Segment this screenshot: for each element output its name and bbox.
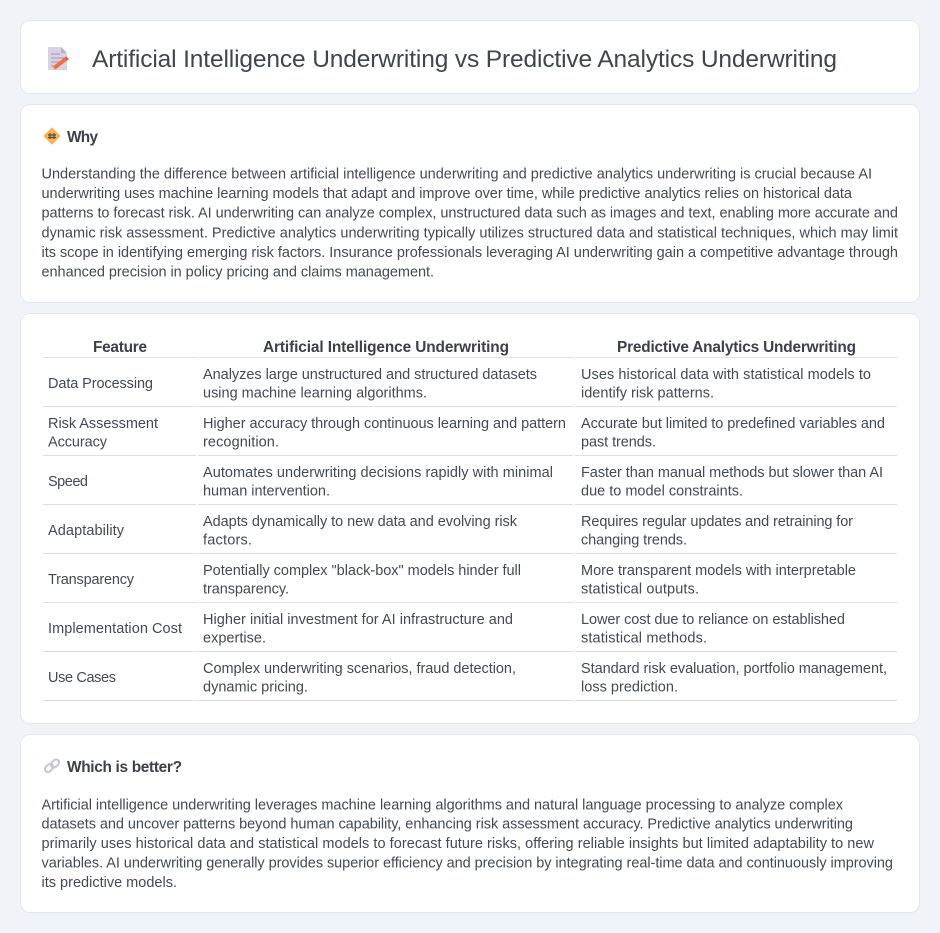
text block: why paragraph: underwriting uses machine learning models that adapt and improve over time, while predictive analytics relies on historical data bbox=[42, 186, 853, 202]
row: adaptability: factors. bbox=[203, 532, 252, 548]
row: implementation cost: statistical methods. bbox=[581, 630, 707, 646]
row: implementation cost: expertise. bbox=[203, 630, 266, 646]
row: adaptability: changing trends. bbox=[581, 532, 687, 548]
row: risk assessment accuracy: Risk Assessment bbox=[48, 416, 158, 432]
text block: which is better paragraph: datasets and uncover patterns beyond human capability, enhancing risk assessment accuracy. Predictive analytics underwriting bbox=[42, 817, 853, 833]
row: speed: due to model constraints. bbox=[581, 484, 743, 500]
row: risk assessment accuracy: Accurate but limited to predefined variables and bbox=[581, 416, 885, 432]
panel: which is better bbox=[20, 734, 920, 913]
row: adaptability: Requires regular updates and retraining for bbox=[581, 514, 853, 530]
row: data processing: Data Processing bbox=[48, 376, 153, 392]
text block: why paragraph: Understanding the difference between artificial intelligence underwriting and predictive analytics underwriting is crucial because AI bbox=[42, 166, 872, 182]
row: speed: human intervention. bbox=[203, 484, 330, 500]
text block: which is better paragraph: its predictive models. bbox=[42, 875, 177, 891]
row: implementation cost: Higher initial investment for AI infrastructure and bbox=[203, 612, 513, 628]
row: data processing bbox=[48, 367, 871, 402]
table header row: Artificial Intelligence Underwriting bbox=[263, 339, 509, 356]
row: risk assessment accuracy: Higher accuracy through continuous learning and pattern bbox=[203, 416, 566, 432]
row: implementation cost bbox=[48, 612, 845, 646]
row: use cases bbox=[48, 661, 887, 696]
row: adaptability: Adapts dynamically to new data and evolving risk bbox=[203, 514, 518, 530]
row: transparency: More transparent models with interpretable bbox=[581, 563, 856, 579]
row: risk assessment accuracy bbox=[48, 416, 885, 450]
row: data processing: identify risk patterns. bbox=[581, 386, 714, 402]
panel: comparison table bbox=[20, 313, 920, 724]
row: adaptability bbox=[48, 514, 853, 548]
row: speed bbox=[48, 465, 883, 500]
row: implementation cost: Implementation Cost bbox=[48, 621, 182, 637]
row: use cases: loss prediction. bbox=[581, 680, 678, 696]
table header row: Predictive Analytics Underwriting bbox=[617, 339, 856, 356]
row: risk assessment accuracy: recognition. bbox=[203, 434, 279, 450]
row: data processing: using machine learning algorithms. bbox=[203, 386, 427, 402]
row: use cases: Standard risk evaluation, portfolio management, bbox=[581, 661, 887, 677]
text block: which is better paragraph: primarily uses historical data and statistical models to forecast future risks, offering reliable insights but limited adaptability to new bbox=[42, 836, 875, 852]
text block: which is better paragraph: variables. AI underwriting generally provides superior efficiency and precision by integrating real-time data and continuously improving bbox=[42, 856, 893, 872]
panel: title header bbox=[20, 20, 920, 94]
row: transparency bbox=[48, 563, 856, 598]
row: use cases: Use Cases bbox=[48, 670, 116, 686]
heading: why: Why bbox=[67, 129, 98, 146]
text block: why paragraph: its scope in identifying emerging risk factors. Insurance professionals leveraging AI underwriting gain a competitive advantage through bbox=[42, 245, 898, 261]
title: Artificial Intelligence Underwriting vs Predictive Analytics Underwriting bbox=[92, 46, 837, 73]
row: speed: Speed bbox=[48, 474, 88, 490]
text block: why paragraph: patterns to forecast risk. AI underwriting can analyze complex, unstructured data such as images and text, enabling more accurate and bbox=[42, 206, 898, 222]
table header row: Feature bbox=[93, 339, 147, 356]
row: risk assessment accuracy: past trends. bbox=[581, 434, 656, 450]
row: implementation cost: Lower cost due to reliance on established bbox=[581, 612, 845, 628]
row: transparency: statistical outputs. bbox=[581, 582, 699, 598]
row: risk assessment accuracy: Accuracy bbox=[48, 434, 108, 450]
row: adaptability: Adaptability bbox=[48, 523, 125, 539]
row: data processing: Analyzes large unstructured and structured datasets bbox=[203, 367, 537, 383]
row: use cases: dynamic pricing. bbox=[203, 680, 308, 696]
icon: link bbox=[44, 758, 60, 773]
table header row bbox=[93, 339, 856, 356]
row: transparency: Potentially complex "black-box" models hinder full bbox=[203, 563, 521, 579]
text block: why paragraph: enhanced precision in policy pricing and claims management. bbox=[42, 264, 434, 280]
row: transparency: Transparency bbox=[48, 572, 135, 588]
panel: why bbox=[20, 104, 920, 303]
text block: which is better paragraph: Artificial intelligence underwriting leverages machine learning algorithms and natural language processing to analyze complex bbox=[42, 797, 844, 813]
heading: which is better: Which is better? bbox=[67, 759, 182, 776]
row: speed: Faster than manual methods but slower than AI bbox=[581, 465, 883, 481]
row: speed: Automates underwriting decisions rapidly with minimal bbox=[203, 465, 553, 481]
icon: document with pencil bbox=[48, 47, 69, 70]
row: transparency: transparency. bbox=[203, 582, 289, 598]
text block: which is better paragraph bbox=[42, 797, 893, 891]
row: use cases: Complex underwriting scenarios, fraud detection, bbox=[203, 661, 516, 677]
text block: why paragraph bbox=[42, 166, 898, 280]
icon: warning diamond bbox=[44, 128, 60, 144]
text block: why paragraph: dynamic risk assessment. Predictive analytics underwriting typically utilizes structured data and statistical techniques, which may limit bbox=[42, 225, 898, 241]
row: data processing: Uses historical data with statistical models to bbox=[581, 367, 871, 383]
